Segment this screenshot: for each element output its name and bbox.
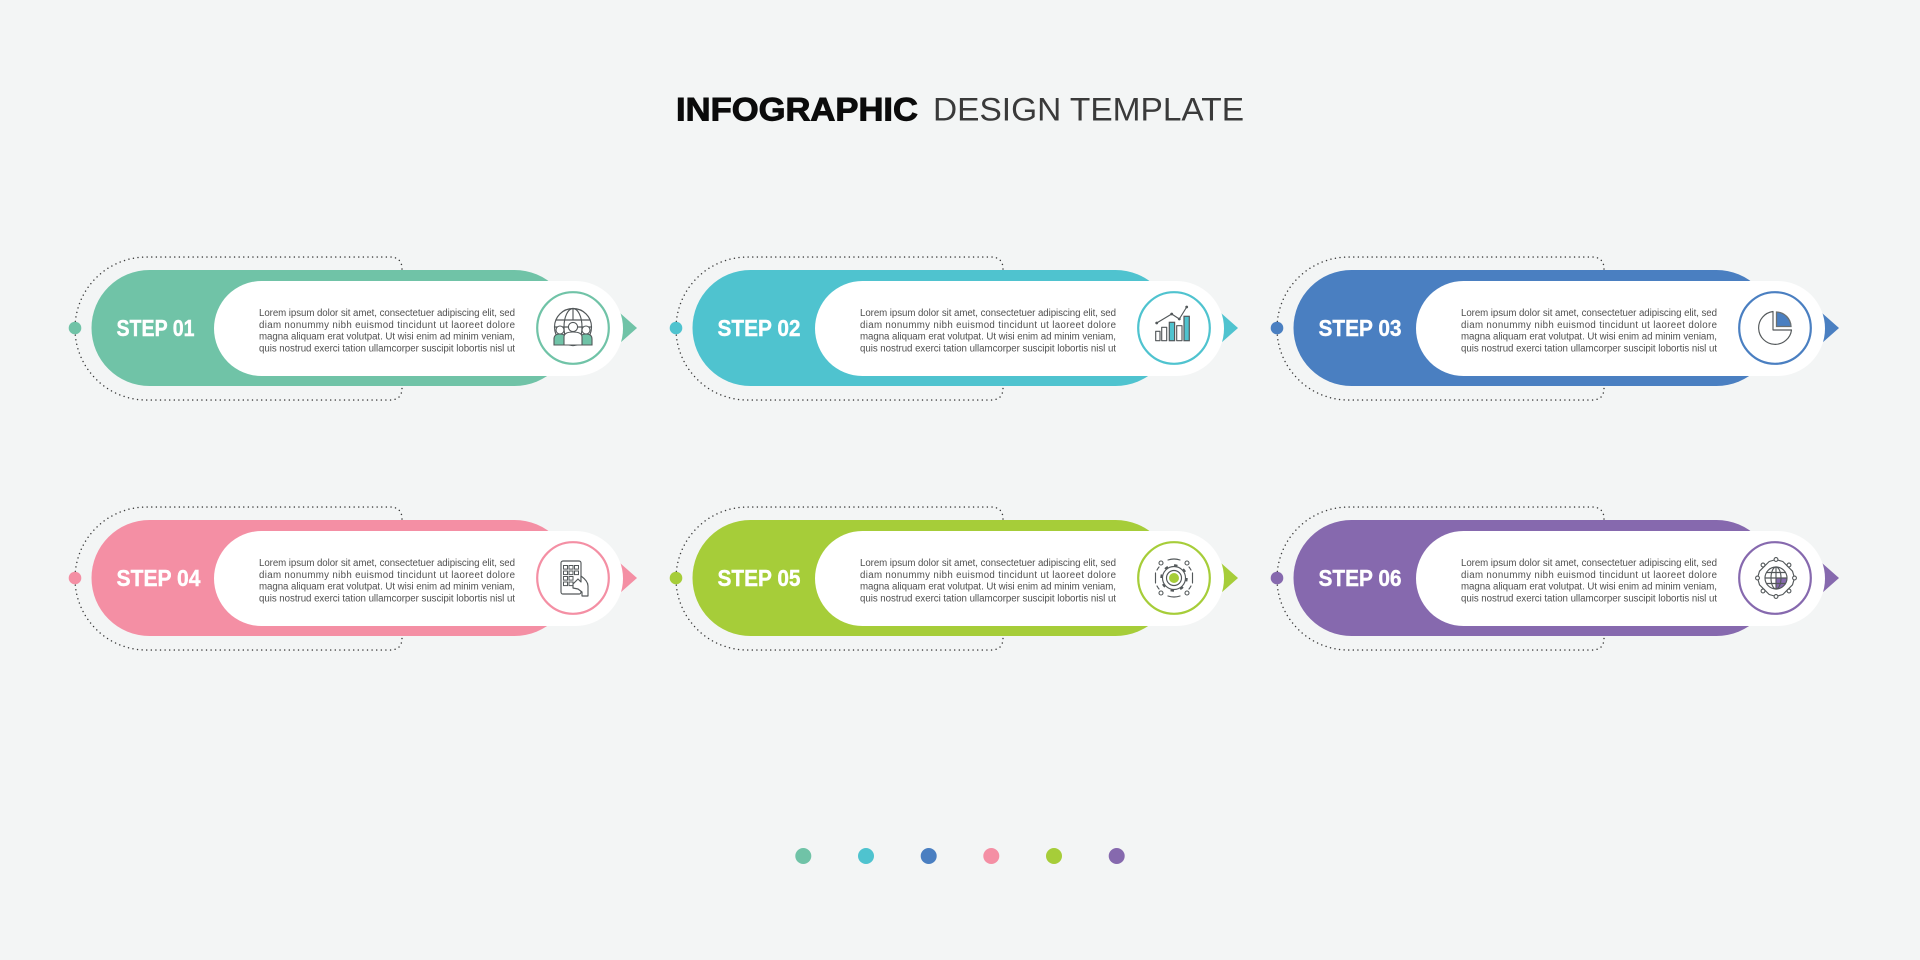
colored pill xyxy=(1294,270,1774,386)
title xyxy=(676,92,1244,128)
step label: STEP 03 xyxy=(1318,315,1402,341)
description text: magna aliquam erat volutpat. Ut wisi enim ad minim veniam, xyxy=(1461,582,1717,593)
description text: quis nostrud exerci tation ullamcorper suscipit lobortis nisl ut xyxy=(259,593,515,604)
description text: Lorem ipsum dolor sit amet, consectetuer adipiscing elit, sed xyxy=(860,558,1116,569)
description text: quis nostrud exerci tation ullamcorper suscipit lobortis nisl ut xyxy=(1461,593,1717,604)
step label: STEP 01 xyxy=(116,315,194,341)
panel: step 02 xyxy=(670,257,1238,400)
description text: diam nonummy nibh euismod tincidunt ut laoreet dolore xyxy=(1461,320,1717,331)
description text: quis nostrud exerci tation ullamcorper suscipit lobortis nisl ut xyxy=(860,343,1116,354)
icon ring xyxy=(537,292,609,364)
start dot xyxy=(670,572,682,584)
colored pill xyxy=(92,270,572,386)
white pill xyxy=(1416,281,1825,376)
arrow xyxy=(620,313,637,343)
white pill xyxy=(815,531,1224,626)
panel: step 05 xyxy=(670,507,1238,650)
description text: diam nonummy nibh euismod tincidunt ut laoreet dolore xyxy=(259,570,515,581)
description text xyxy=(259,558,515,604)
description text: Lorem ipsum dolor sit amet, consectetuer adipiscing elit, sed xyxy=(860,308,1116,319)
panel: step 01 xyxy=(69,257,637,400)
description text: diam nonummy nibh euismod tincidunt ut laoreet dolore xyxy=(1461,570,1717,581)
description text: Lorem ipsum dolor sit amet, consectetuer adipiscing elit, sed xyxy=(1461,558,1717,569)
start dot xyxy=(69,572,81,584)
arrow xyxy=(1221,313,1238,343)
icon: network globe xyxy=(1756,558,1796,598)
description text xyxy=(1461,308,1717,354)
description text: quis nostrud exerci tation ullamcorper suscipit lobortis nisl ut xyxy=(259,343,515,354)
panel: step 03 xyxy=(1271,257,1839,400)
description text: diam nonummy nibh euismod tincidunt ut laoreet dolore xyxy=(860,320,1116,331)
arrow xyxy=(1822,313,1839,343)
step label: STEP 06 xyxy=(1318,565,1402,591)
white pill xyxy=(214,281,623,376)
icon: phone keypad with hand xyxy=(561,561,588,596)
step label: STEP 05 xyxy=(718,565,800,591)
icon ring xyxy=(1739,292,1811,364)
panel: step 06 xyxy=(1271,507,1839,650)
arrow xyxy=(1822,563,1839,593)
description text: magna aliquam erat volutpat. Ut wisi enim ad minim veniam, xyxy=(860,582,1116,593)
icon ring xyxy=(1138,542,1210,614)
icon: bar chart with trend line xyxy=(1155,306,1189,341)
start dot xyxy=(1271,322,1283,334)
colored pill xyxy=(692,270,1174,386)
start dot xyxy=(69,322,81,334)
description text: Lorem ipsum dolor sit amet, consectetuer adipiscing elit, sed xyxy=(259,558,515,569)
description text: quis nostrud exerci tation ullamcorper suscipit lobortis nisl ut xyxy=(860,593,1116,604)
panel: step 04 xyxy=(69,507,637,650)
description text: diam nonummy nibh euismod tincidunt ut laoreet dolore xyxy=(860,570,1116,581)
description text: magna aliquam erat volutpat. Ut wisi enim ad minim veniam, xyxy=(259,332,515,343)
icon: gear with nodes xyxy=(1156,559,1192,597)
start dot xyxy=(1271,572,1283,584)
title: INFOGRAPHIC xyxy=(676,92,918,128)
white pill xyxy=(815,281,1224,376)
description text: quis nostrud exerci tation ullamcorper suscipit lobortis nisl ut xyxy=(1461,343,1717,354)
description text: Lorem ipsum dolor sit amet, consectetuer adipiscing elit, sed xyxy=(259,308,515,319)
description text: magna aliquam erat volutpat. Ut wisi enim ad minim veniam, xyxy=(860,332,1116,343)
colored pill xyxy=(1294,520,1774,636)
description text xyxy=(860,558,1116,604)
legend dots xyxy=(795,848,1125,864)
white pill xyxy=(1416,531,1825,626)
arrow xyxy=(1221,563,1238,593)
description text: magna aliquam erat volutpat. Ut wisi enim ad minim veniam, xyxy=(1461,332,1717,343)
start dot xyxy=(670,322,682,334)
icon ring xyxy=(537,542,609,614)
title: DESIGN TEMPLATE xyxy=(933,92,1244,128)
step label: STEP 04 xyxy=(116,565,200,591)
icon ring xyxy=(1739,542,1811,614)
icon: pie chart xyxy=(1759,312,1792,344)
white pill xyxy=(214,531,623,626)
description text xyxy=(860,308,1116,354)
description text: diam nonummy nibh euismod tincidunt ut laoreet dolore xyxy=(259,320,515,331)
arrow xyxy=(620,563,637,593)
description text: magna aliquam erat volutpat. Ut wisi enim ad minim veniam, xyxy=(259,582,515,593)
step label: STEP 02 xyxy=(718,315,800,341)
icon: globe with people xyxy=(554,308,592,346)
description text: Lorem ipsum dolor sit amet, consectetuer adipiscing elit, sed xyxy=(1461,308,1717,319)
description text xyxy=(1461,558,1717,604)
colored pill xyxy=(92,520,572,636)
icon ring xyxy=(1138,292,1210,364)
colored pill xyxy=(692,520,1174,636)
description text xyxy=(259,308,515,354)
